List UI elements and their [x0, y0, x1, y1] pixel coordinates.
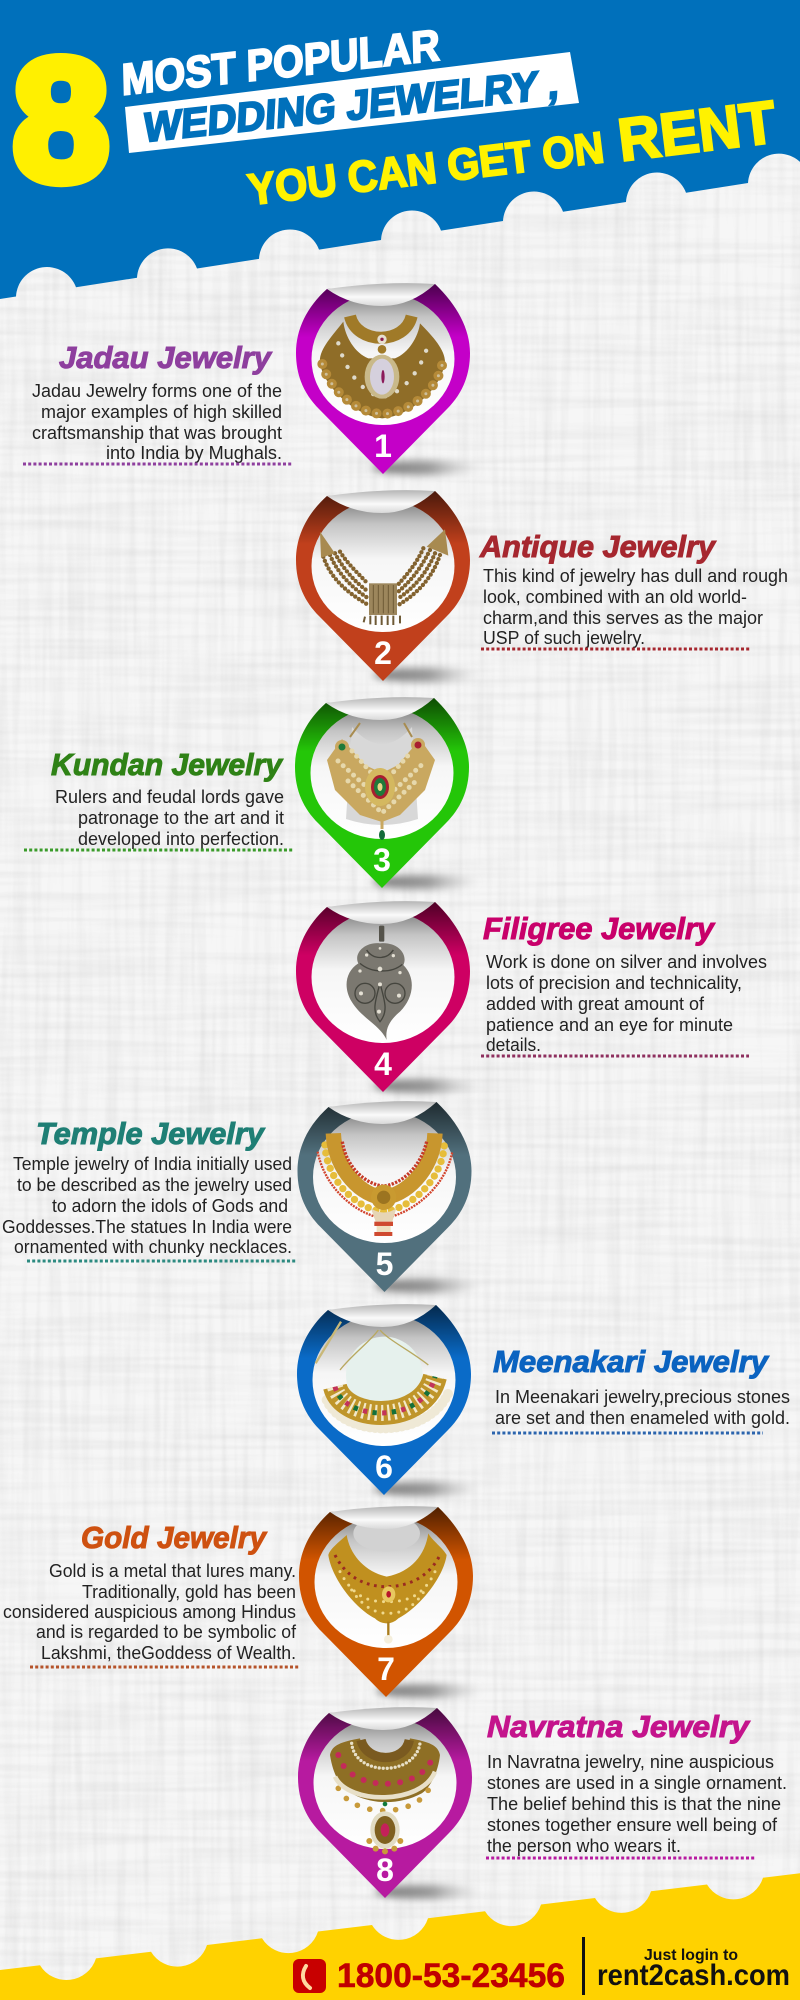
heading: Jadau Jewelry: [59, 340, 273, 375]
pin 3: kundan necklace: [295, 697, 476, 889]
section: kundan jewelry: [24, 747, 293, 850]
pin 2: antique necklace: [296, 490, 477, 682]
title word: rent: RENT: [614, 88, 779, 174]
number 7: 7: [377, 1651, 395, 1687]
title line: you can get on: YOU CAN GET ON: [245, 123, 607, 215]
description: Lakshmi, theGoddess of Wealth.: [41, 1643, 296, 1663]
description: In Navratna jewelry, nine auspicious: [487, 1752, 774, 1772]
description: [483, 566, 788, 648]
number 1: 1: [374, 428, 392, 464]
description: patience and an eye for minute: [486, 1015, 733, 1035]
necklace image: [316, 1322, 449, 1428]
pin 1: jadau necklace: [296, 283, 477, 475]
description: [486, 952, 767, 1055]
description: considered auspicious among Hindus: [3, 1602, 296, 1622]
description: [3, 1561, 297, 1663]
necklace image: [327, 723, 435, 840]
description: developed into perfection.: [78, 829, 284, 849]
description: are set and then enameled with gold.: [495, 1408, 790, 1428]
section: meenakari jewelry: [492, 1344, 790, 1433]
description: to be described as the jewelry used: [17, 1175, 292, 1195]
pendant image: [347, 926, 412, 1040]
pin 8: navratna necklace: [298, 1707, 479, 1899]
heading: Filigree Jewelry: [483, 911, 716, 946]
description: craftsmanship that was brought: [32, 423, 282, 443]
pin 5: temple necklace: [298, 1101, 478, 1293]
necklace image: [320, 529, 448, 625]
title: [13, 21, 779, 217]
number 8: 8: [376, 1852, 394, 1888]
description: [55, 787, 284, 849]
description: added with great amount of: [486, 994, 705, 1014]
necklace image: [328, 1515, 447, 1644]
number 3: 3: [373, 842, 391, 878]
header: blue scalloped banner: [0, 0, 800, 299]
description: In Meenakari jewelry,precious stones: [495, 1387, 790, 1407]
section: navratna jewelry: [486, 1709, 787, 1858]
description: into India by Mughals.: [106, 443, 282, 463]
description: patronage to the art and it: [78, 808, 284, 828]
number 6: 6: [375, 1449, 393, 1485]
necklace image: [318, 1133, 452, 1236]
description: charm,and this serves as the major: [483, 608, 763, 628]
description: Goddesses.The statues In India were: [2, 1217, 292, 1237]
description: stones are used in a single ornament.: [487, 1773, 787, 1793]
description: [495, 1387, 790, 1428]
description: Traditionally, gold has been: [82, 1582, 296, 1602]
number 2: 2: [374, 635, 392, 671]
phone number: 1800-53-23456: [337, 1957, 565, 1995]
heading: Navratna Jewelry: [487, 1709, 751, 1744]
description: look, combined with an old world-: [483, 587, 747, 607]
description: and is regarded to be symbolic of: [36, 1622, 297, 1642]
pin 6: meenakari necklace: [297, 1304, 478, 1496]
description: lots of precision and technicality,: [486, 973, 742, 993]
number 5: 5: [376, 1246, 393, 1282]
login note: Just login to: [644, 1947, 738, 1964]
description: major examples of high skilled: [41, 402, 282, 422]
section: temple jewelry: [2, 1116, 296, 1261]
heading: Meenakari Jewelry: [493, 1344, 770, 1379]
section: antique jewelry: [479, 529, 788, 649]
heading: Antique Jewelry: [479, 529, 717, 564]
number 4: 4: [374, 1046, 392, 1082]
description: USP of such jewelry.: [483, 628, 645, 648]
heading: Gold Jewelry: [81, 1520, 268, 1555]
heading: Kundan Jewelry: [51, 747, 284, 782]
description: to adorn the idols of Gods and: [52, 1196, 288, 1216]
footer contact: [293, 1937, 790, 1995]
title line: most popular: MOST POPULAR: [121, 21, 440, 105]
big yellow 8: 8: [13, 22, 109, 217]
description: Rulers and feudal lords gave: [55, 787, 284, 807]
section: filigree jewelry: [481, 911, 767, 1056]
white banner: [125, 52, 579, 153]
necklace image: [320, 316, 445, 418]
section: jadau jewelry: [23, 340, 292, 464]
pin 7: gold necklace: [299, 1506, 480, 1698]
description: This kind of jewelry has dull and rough: [483, 566, 788, 586]
pin 4: filigree pendant: [296, 901, 477, 1093]
description: Gold is a metal that lures many.: [49, 1561, 296, 1581]
description: stones together ensure well being of: [487, 1815, 778, 1835]
title line: wedding jewelry: WEDDING JEWELRY ,: [143, 60, 561, 151]
description: [32, 381, 282, 463]
necklace image: [330, 1738, 440, 1854]
description: Temple jewelry of India initially used: [13, 1154, 292, 1174]
description: Jadau Jewelry forms one of the: [32, 381, 282, 401]
heading: Temple Jewelry: [36, 1116, 266, 1151]
section: gold jewelry: [3, 1520, 299, 1667]
icon: phone: [293, 1959, 326, 1993]
description: [487, 1752, 787, 1856]
description: Work is done on silver and involves: [486, 952, 767, 972]
footer: yellow scalloped band: [0, 1873, 800, 2000]
description: details.: [486, 1035, 541, 1055]
description: [2, 1154, 292, 1257]
description: The belief behind this is that the nine: [487, 1794, 781, 1814]
description: ornamented with chunky necklaces.: [14, 1237, 292, 1257]
description: the person who wears it.: [487, 1836, 681, 1856]
